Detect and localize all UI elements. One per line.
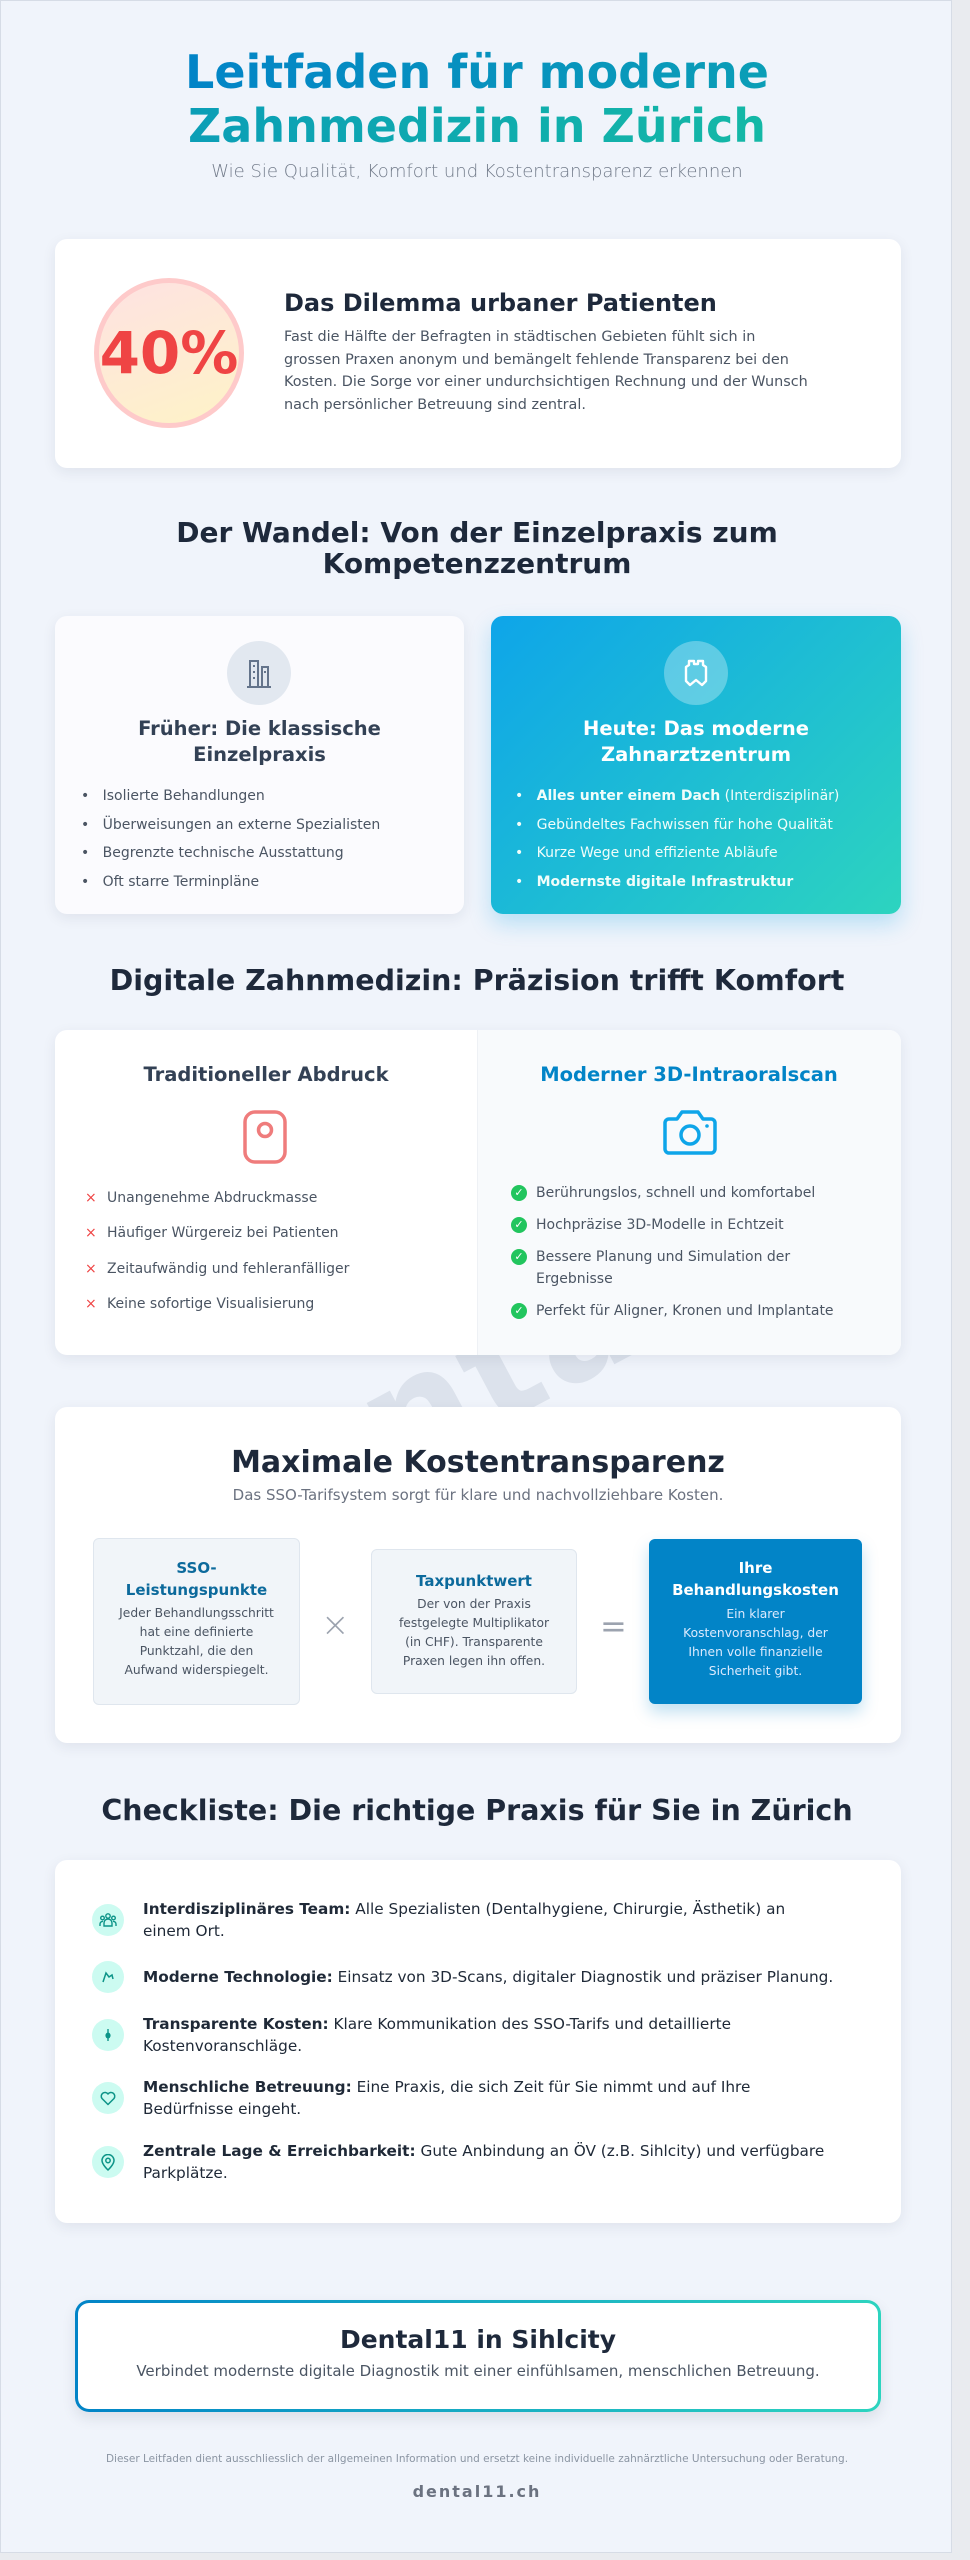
item: lage: Parkplätze. bbox=[143, 2164, 228, 2182]
box: taxpunktwert: (in CHF). Transparente Praxen legen ihn offen. bbox=[403, 1635, 545, 1668]
box: leistungspunkte: Jeder Behandlungsschritt hat eine definierte Punktzahl, die den Aufwand widerspiegelt. bbox=[119, 1606, 274, 1677]
panel: heute bbox=[491, 616, 901, 914]
panel: checklist bbox=[55, 1860, 901, 2223]
modern list bbox=[511, 1185, 834, 1319]
item: betreuung: Menschliche Betreuung: Eine Praxis, die sich Zeit für Sie nimmt und auf Ihre bbox=[143, 2078, 750, 2096]
item: lage bbox=[92, 2142, 824, 2182]
heading: Wandel bbox=[176, 516, 778, 580]
modern list: Hochpräzise 3D-Modelle in Echtzeit bbox=[536, 1217, 784, 1233]
modern heading: Moderner 3D-Intraoralscan bbox=[540, 1063, 838, 1086]
item: kosten: Kostenvoranschläge. bbox=[143, 2037, 302, 2055]
traditional list: × bbox=[85, 1296, 97, 1312]
box: behandlungskosten bbox=[649, 1539, 862, 1704]
früher list: • Isolierte Behandlungen bbox=[81, 788, 265, 804]
banner: dental11: Verbindet modernste digitale Diagnostik mit einer einfühlsamen, menschlichen Betreuung. bbox=[136, 2362, 820, 2380]
traditional list: × bbox=[85, 1190, 97, 1206]
dilemma text: grossen Praxen anonym und bemängelt fehlende Transparenz bei den bbox=[284, 352, 789, 368]
traditional list bbox=[85, 1190, 350, 1312]
banner: dental11: Dental11 in Sihlcity bbox=[340, 2325, 616, 2354]
stat circle 40%: 40% bbox=[100, 319, 238, 387]
heute list bbox=[515, 788, 839, 890]
box: behandlungskosten: Behandlungskosten bbox=[672, 1581, 839, 1599]
panel: kostentransparenz bbox=[55, 1407, 901, 1743]
früher list: • Oft starre Terminpläne bbox=[81, 874, 259, 890]
traditional list: Häufiger Würgereiz bei Patienten bbox=[107, 1225, 339, 1241]
dilemma text: Fast die Hälfte der Befragten in städtischen Gebieten fühlt sich in bbox=[284, 329, 755, 345]
icon: camera bbox=[663, 1110, 717, 1155]
heading: Wandel: Der Wandel: Von der Einzelpraxis zum bbox=[176, 516, 778, 549]
title: Zahnmedizin in Zürich bbox=[188, 99, 766, 153]
operator: equals: = bbox=[600, 1607, 627, 1645]
traditional list: × bbox=[85, 1225, 97, 1241]
banner: dental11 bbox=[75, 2300, 881, 2412]
heute heading: Heute: Das moderne bbox=[583, 717, 809, 740]
item: technologie: Moderne Technologie: Einsatz von 3D-Scans, digitaler Diagnostik und präziser Planung. bbox=[143, 1968, 833, 1986]
traditional list: Zeitaufwändig und fehleranfälliger bbox=[107, 1261, 349, 1277]
watermark: dental11 bbox=[138, 1095, 909, 1615]
title bbox=[185, 45, 769, 153]
traditional heading: Traditioneller Abdruck bbox=[143, 1063, 389, 1086]
item: betreuung bbox=[92, 2078, 750, 2118]
icon: impression tray bbox=[243, 1110, 287, 1164]
box: behandlungskosten: Ihre bbox=[739, 1559, 772, 1577]
footer url: dental11.ch bbox=[413, 2482, 541, 2501]
dilemma text bbox=[284, 329, 808, 412]
box: taxpunktwert: Taxpunktwert bbox=[416, 1572, 532, 1590]
operator: times: × bbox=[321, 1605, 350, 1645]
dilemma text: nach persönlicher Betreuung sind zentral. bbox=[284, 396, 586, 412]
heute list: • Gebündeltes Fachwissen für hohe Qualität bbox=[515, 817, 833, 833]
früher heading: Einzelpraxis bbox=[193, 743, 326, 766]
heading: Wandel: Kompetenzzentrum bbox=[323, 547, 631, 580]
item: kosten bbox=[92, 2015, 731, 2055]
disclaimer: Dieser Leitfaden dient ausschliesslich der allgemeinen Information und ersetzt keine individuelle zahnärztliche Untersuchung oder Beratung. bbox=[106, 2453, 848, 2465]
modern list: ✓ bbox=[514, 1218, 524, 1231]
früher list: • Überweisungen an externe Spezialisten bbox=[81, 817, 380, 833]
item: betreuung: Bedürfnisse eingeht. bbox=[143, 2100, 301, 2118]
icon: tooth bbox=[664, 641, 728, 705]
box: taxpunktwert bbox=[371, 1549, 577, 1694]
modern list: ✓ bbox=[514, 1250, 524, 1263]
heute heading: Zahnarztzentrum bbox=[601, 743, 791, 766]
heute list: • Kurze Wege und effiziente Abläufe bbox=[515, 845, 778, 861]
item: team: Interdisziplinäres Team: Alle Spezialisten (Dentalhygiene, Chirurgie, Ästhetik) an bbox=[143, 1900, 785, 1918]
heading: checkliste: Checkliste: Die richtige Praxis für Sie in Zürich bbox=[101, 1794, 853, 1827]
kosten subtitle: Das SSO-Tarifsystem sorgt für klare und nachvollziehbare Kosten. bbox=[233, 1486, 723, 1504]
subtitle: Wie Sie Qualität, Komfort und Kostentransparenz erkennen bbox=[211, 161, 743, 182]
früher list bbox=[81, 788, 380, 890]
item: team: einem Ort. bbox=[143, 1922, 225, 1940]
modern list: Perfekt für Aligner, Kronen und Implantate bbox=[536, 1303, 834, 1319]
box: behandlungskosten: Ein klarer Kostenvoranschlag, der Ihnen volle finanzielle Sicherheit gibt. bbox=[683, 1607, 828, 1678]
item: kosten: Transparente Kosten: Klare Kommunikation des SSO-Tarifs und detaillierte bbox=[143, 2015, 731, 2033]
modern list: ✓ bbox=[514, 1186, 524, 1199]
icon: building bbox=[227, 641, 291, 705]
panel: früher bbox=[55, 616, 464, 914]
heute list: • Modernste digitale Infrastruktur bbox=[515, 874, 793, 890]
panel: comparison bbox=[55, 1030, 901, 1355]
kosten heading: Maximale Kostentransparenz bbox=[231, 1445, 725, 1480]
panel: dilemma bbox=[55, 239, 901, 468]
traditional list: Keine sofortige Visualisierung bbox=[107, 1296, 314, 1312]
früher list: • Begrenzte technische Ausstattung bbox=[81, 845, 344, 861]
dilemma heading: Das Dilemma urbaner Patienten bbox=[284, 289, 717, 317]
item: team bbox=[92, 1900, 785, 1940]
heute heading bbox=[583, 717, 809, 766]
heute list: • Alles unter einem Dach (Interdisziplinär) bbox=[515, 788, 839, 804]
item: technologie bbox=[92, 1961, 833, 1993]
früher heading bbox=[138, 717, 381, 766]
title: Leitfaden für moderne bbox=[185, 45, 769, 99]
früher heading: Früher: Die klassische bbox=[138, 717, 381, 740]
modern list: ✓ bbox=[514, 1304, 524, 1317]
dilemma text: Kosten. Die Sorge vor einer undurchsichtigen Rechnung und der Wunsch bbox=[284, 374, 808, 390]
box: leistungspunkte: Leistungspunkte bbox=[126, 1581, 267, 1599]
box: leistungspunkte: SSO- bbox=[176, 1559, 217, 1577]
box: leistungspunkte bbox=[93, 1538, 300, 1705]
heading: digitale: Digitale Zahnmedizin: Präzision trifft Komfort bbox=[110, 964, 844, 997]
modern list: Bessere Planung und Simulation der Ergebnisse bbox=[536, 1249, 790, 1287]
item: lage: Zentrale Lage & Erreichbarkeit: Gute Anbindung an ÖV (z.B. Sihlcity) und verfügbare bbox=[143, 2142, 824, 2160]
traditional list: Unangenehme Abdruckmasse bbox=[107, 1190, 317, 1206]
box: taxpunktwert: Der von der Praxis festgelegte Multiplikator bbox=[399, 1597, 549, 1630]
modern list: Berührungslos, schnell und komfortabel bbox=[536, 1185, 815, 1201]
stat circle 40% bbox=[94, 278, 244, 428]
traditional list: × bbox=[85, 1261, 97, 1277]
